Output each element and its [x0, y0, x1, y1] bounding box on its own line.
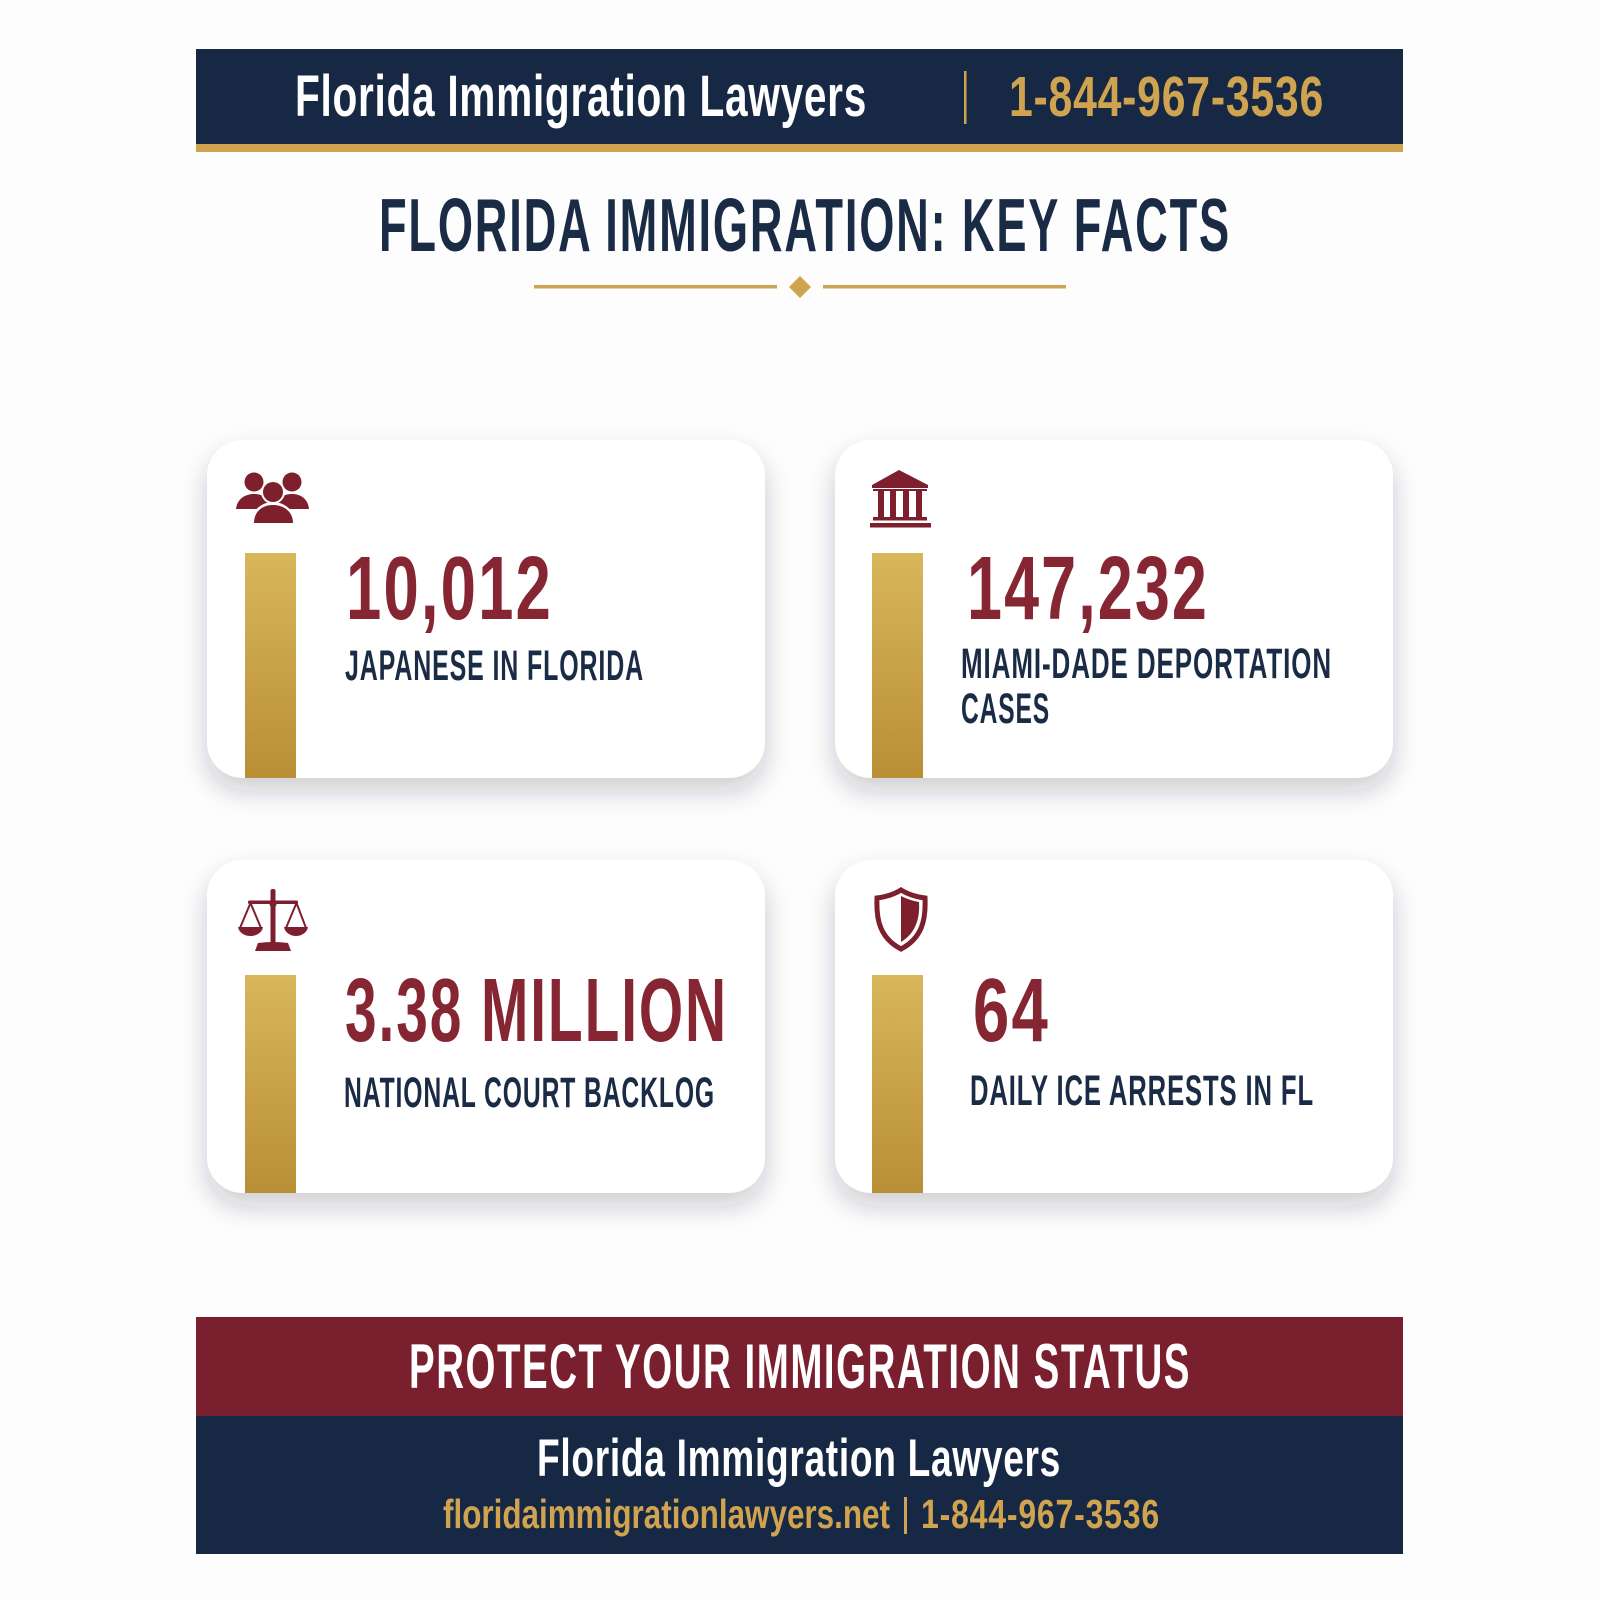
title divider with diamond: [534, 276, 1066, 298]
footer firm name: Florida Immigration Lawyers: [537, 1429, 1061, 1488]
label: Japanese in Florida: JAPANESE IN FLORIDA: [345, 642, 644, 690]
label: National court backlog: NATIONAL COURT BACKLOG: [344, 1069, 715, 1117]
label: Daily ICE arrests in FL: DAILY ICE ARRESTS IN FL: [970, 1067, 1314, 1115]
footer banner: call to action: [196, 1317, 1403, 1416]
footer separator: [904, 1497, 907, 1534]
footer phone number: 1-844-967-3536: [921, 1491, 1160, 1537]
stat: 147,232: 147,232: [967, 539, 1209, 639]
footer banner: contact details: [196, 1416, 1403, 1554]
icon: people group: [236, 472, 309, 525]
panel: Miami-Dade deportation cases: [835, 440, 1393, 778]
stat: 3.38 million: 3.38 MILLION: [345, 961, 728, 1061]
header bar: [196, 49, 1403, 152]
header separator: [964, 71, 966, 124]
panel: Japanese in Florida: [207, 440, 765, 778]
label: Miami-Dade deportation cases: MIAMI-DADE DEPORTATION: [961, 640, 1332, 688]
panel: Daily ICE arrests: [835, 860, 1393, 1193]
label: Miami-Dade deportation cases: CASES: [961, 685, 1050, 733]
stat: 64: 64: [973, 961, 1050, 1061]
footer website: floridaimmigrationlawyers.net: [443, 1491, 890, 1537]
header firm name: Florida Immigration Lawyers: [295, 64, 867, 129]
label: Miami-Dade deportation cases: [961, 640, 1332, 733]
header phone number: 1-844-967-3536: [1009, 65, 1324, 129]
icon: shield: [877, 890, 925, 949]
icon: scales of justice: [238, 889, 308, 951]
stat: 10,012: 10,012: [346, 539, 553, 639]
icon: courthouse: [870, 470, 931, 528]
panel: National court backlog: [207, 860, 765, 1193]
